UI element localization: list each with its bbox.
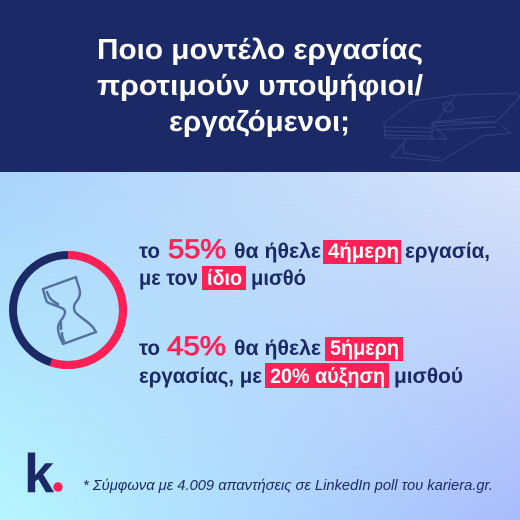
statement: 55%: θα ήθελε [234,240,321,263]
highlight: 4ήμερη [323,240,401,264]
title [97,34,423,138]
statement: 45%: εργασίας, με [139,365,262,388]
logo: kariera: k [24,442,54,504]
statement: 45%: μισθού [394,365,463,388]
statement: 55%: μισθό [251,267,306,290]
statement: 55%: 55% [168,234,226,264]
title: εργαζόμενοι; [169,106,350,138]
statement: 45%: το [139,337,160,360]
donut chart: 55% / 45% [13,255,123,365]
highlight: 20% αύξηση [265,363,389,388]
statement: 55%: 4ήμερη [328,240,399,263]
statement: 45% [139,331,463,388]
title: Ποιο μοντέλο εργασίας [97,34,423,66]
highlight: ίδιο [202,266,246,290]
statement: 55%: με τον [139,267,198,290]
title: προτιμούν υποψήφιοι/ [97,70,423,102]
statement: 55% [139,234,490,290]
statement: 55%: το [139,240,160,263]
statement: 55%: ίδιο [207,267,242,290]
statement: 55%: εργασία, [405,240,490,263]
statement: 45%: 20% αύξηση [270,365,385,388]
icon: hourglass [43,277,96,344]
footnote: * Σύμφωνα με 4.009 απαντήσεις σε LinkedIn poll του kariera.gr. [83,477,493,494]
icon: banknotes stack [384,93,520,161]
highlight: 5ήμερη [325,337,403,361]
statement: 45%: 45% [167,331,226,361]
statement: 45%: 5ήμερη [330,337,399,360]
statement: 45%: θα ήθελε [234,337,321,360]
